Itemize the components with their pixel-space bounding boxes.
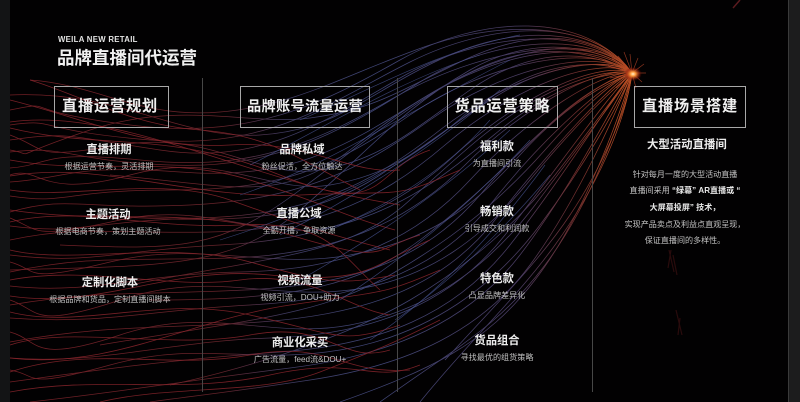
- item: public domain: 全勤开播，争取资源: [263, 226, 335, 235]
- description: 针对每月一度的大型活动直播: [633, 170, 737, 179]
- item: themed events: [55, 208, 161, 236]
- item: welfare: 福利款: [480, 141, 514, 153]
- item: custom script: [49, 276, 171, 304]
- item: combination: [461, 334, 534, 362]
- item: custom script: 根据品牌和货品，定制直播间脚本: [49, 295, 171, 304]
- item: themed events: 主题活动: [85, 209, 131, 221]
- description: 直播间采用 “绿幕” AR直播或 “: [630, 186, 740, 195]
- heading box: [447, 86, 558, 128]
- item: commercial purchase: 商业化采买: [272, 337, 328, 349]
- item: schedule: [64, 143, 154, 171]
- item: public domain: [262, 207, 336, 235]
- description: 保证直播间的多样性。: [645, 236, 725, 245]
- item: public domain: 直播公域: [276, 208, 322, 220]
- item: custom script: 定制化脚本: [82, 277, 138, 289]
- divider 1: [202, 78, 203, 392]
- item: themed events: 根据电商节奏，策划主题活动: [55, 227, 161, 236]
- item: schedule: 根据运营节奏，灵活排期: [64, 162, 154, 171]
- heading box: [634, 86, 746, 128]
- item: combination: 寻找最优的组货策略: [461, 353, 533, 362]
- item: brand private domain: 粉丝促活，全方位触达: [262, 162, 342, 171]
- heading box: 直播场景搭建: [642, 98, 738, 115]
- item: signature: [469, 272, 525, 300]
- panel: live planning: [49, 86, 171, 304]
- faint red streak lower right: [668, 250, 682, 335]
- left edge strip: [0, 0, 10, 402]
- item: bestseller: [465, 205, 529, 233]
- item: welfare: 为直播间引流: [473, 159, 521, 168]
- description: 大屏幕投屏” 技术，: [650, 203, 720, 212]
- item: video traffic: 视频流量: [277, 275, 323, 287]
- subheading: 大型活动直播间: [647, 139, 727, 151]
- item: signature: 特色款: [480, 273, 514, 285]
- heading box: 货品运营策略: [455, 98, 550, 115]
- heading box: 品牌账号流量运营: [247, 99, 363, 115]
- divider 3: [592, 78, 593, 392]
- item: bestseller: 畅销款: [480, 206, 514, 218]
- item: commercial purchase: 广告流量，feed流&DOU+: [254, 355, 346, 364]
- focal flare burst: [608, 52, 646, 90]
- item: bestseller: 引导成交和利润款: [465, 224, 529, 233]
- item: welfare: [473, 140, 521, 168]
- item: brand private domain: 品牌私域: [279, 144, 325, 156]
- panel: account traffic: [240, 86, 370, 364]
- panel: scene building: [625, 86, 746, 245]
- heading box: [240, 86, 370, 128]
- item: video traffic: [260, 274, 340, 302]
- item: combination: 货品组合: [474, 335, 520, 347]
- panel: product strategy: [447, 86, 558, 362]
- divider 2: [397, 78, 398, 392]
- title: 品牌直播间代运营: [57, 48, 197, 68]
- heading box: [54, 86, 169, 128]
- description: 实现产品卖点及利益点直观呈现，: [625, 220, 745, 229]
- item: commercial purchase: [254, 336, 346, 364]
- item: schedule: 直播排期: [86, 144, 132, 156]
- right edge strip: [788, 0, 800, 402]
- brand label: WEILA NEW RETAIL: [58, 35, 138, 44]
- description: [625, 170, 745, 245]
- item: video traffic: 视频引流，DOU+助力: [260, 293, 340, 302]
- item: signature: 凸显品牌差异化: [469, 291, 525, 300]
- heading box: 直播运营规划: [62, 98, 158, 115]
- item: brand private domain: [262, 143, 342, 171]
